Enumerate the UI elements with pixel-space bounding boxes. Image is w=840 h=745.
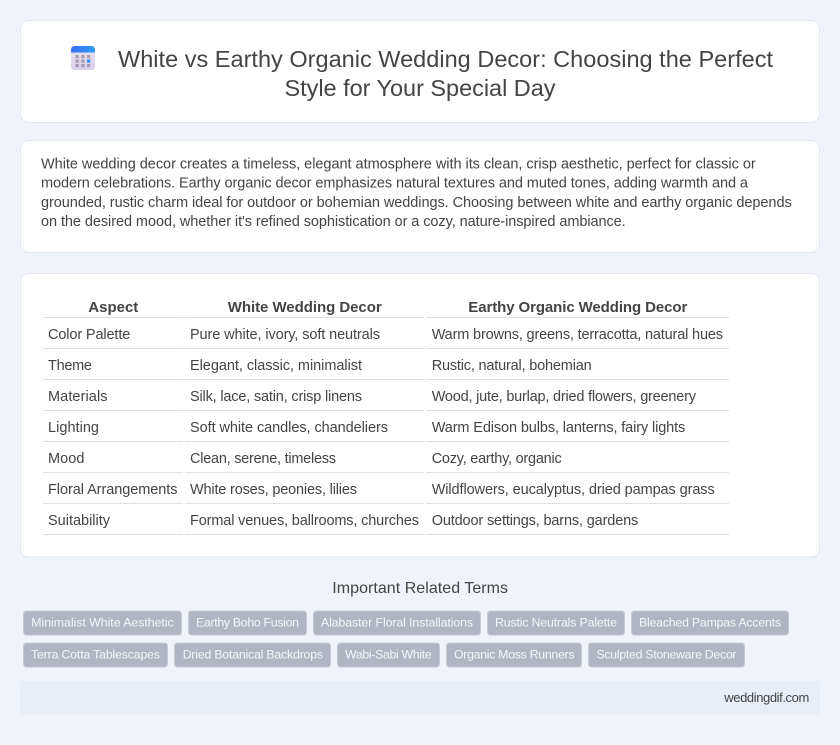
pill: alabaster floral installations: Alabaster Floral Installations (321, 616, 473, 630)
row: suitability: Outdoor settings, barns, gardens (432, 513, 638, 529)
title: Style for Your Special Day (284, 75, 556, 101)
table header (43, 299, 729, 318)
pill: bleached pampas accents: Bleached Pampas Accents (639, 616, 781, 630)
row: mood (43, 451, 729, 473)
row: color palette (43, 327, 729, 349)
title (118, 46, 773, 101)
pill: rustic neutrals palette (488, 611, 624, 635)
pill: sculpted stoneware decor (588, 643, 744, 667)
panel: comparison table (20, 274, 820, 557)
heading: important related terms: Important Related Terms (332, 580, 508, 597)
row: color palette: Warm browns, greens, terracotta, natural hues (432, 327, 723, 343)
row: materials: Wood, jute, burlap, dried flowers, greenery (432, 389, 697, 405)
pill: terra cotta tablescapes: Terra Cotta Tablescapes (31, 648, 160, 662)
intro paragraph (41, 156, 792, 230)
pill: minimalist white aesthetic: Minimalist White Aesthetic (31, 616, 174, 630)
row: mood: Mood (48, 451, 84, 467)
pill: organic moss runners: Organic Moss Runners (454, 648, 574, 662)
intro paragraph: on the desired mood, whether it's refined sophistication or a cozy, nature-inspired ambiance. (41, 214, 626, 230)
row: lighting: Lighting (48, 420, 99, 436)
intro paragraph: grounded, rustic charm ideal for outdoor or bohemian weddings. Choosing between white and earthy organic depends (41, 195, 792, 211)
pill: sculpted stoneware decor: Sculpted Stoneware Decor (596, 648, 736, 662)
row: mood: Clean, serene, timeless (190, 451, 336, 467)
row: lighting (43, 420, 729, 442)
row: materials: Materials (48, 389, 108, 405)
row: materials (43, 389, 729, 411)
pill: organic moss runners (446, 643, 582, 667)
row: theme: Elegant, classic, minimalist (190, 358, 362, 374)
intro paragraph: White wedding decor creates a timeless, elegant atmosphere with its clean, crisp aesthetic, perfect for classic or (41, 156, 756, 172)
pill: wabi-sabi white (338, 643, 440, 667)
pill: bleached pampas accents (632, 611, 788, 635)
panel: introduction (20, 140, 820, 252)
row: theme: Rustic, natural, bohemian (432, 358, 592, 374)
row: suitability: Suitability (48, 513, 111, 529)
pill: minimalist white aesthetic (24, 611, 182, 635)
pill: dried botanical backdrops: Dried Botanical Backdrops (183, 648, 323, 662)
row: floral arrangements: White roses, peonies, lilies (190, 482, 357, 498)
tag pills (24, 611, 788, 667)
footer bar (20, 681, 820, 714)
table header: White Wedding Decor (228, 299, 382, 316)
row: floral arrangements (43, 482, 729, 504)
table header: Aspect (88, 299, 138, 316)
intro paragraph: modern celebrations. Earthy organic decor emphasizes natural textures and muted tones, adding warmth and a (41, 176, 749, 192)
pill: earthy boho fusion: Earthy Boho Fusion (196, 616, 299, 630)
footer credit: weddingdif.com (723, 690, 809, 705)
pill: dried botanical backdrops (174, 643, 330, 667)
row: color palette: Color Palette (48, 327, 130, 343)
pill: earthy boho fusion (188, 611, 306, 635)
row: lighting: Warm Edison bulbs, lanterns, fairy lights (432, 420, 685, 436)
pill: alabaster floral installations (314, 611, 480, 635)
row: floral arrangements: Wildflowers, eucalyptus, dried pampas grass (432, 482, 715, 498)
row: theme (43, 358, 729, 380)
panel: header (20, 20, 820, 122)
pill: wabi-sabi white: Wabi-Sabi White (345, 648, 432, 662)
row: lighting: Soft white candles, chandeliers (190, 420, 388, 436)
row: floral arrangements: Floral Arrangements (48, 482, 178, 498)
row: suitability: Formal venues, ballrooms, churches (190, 513, 419, 529)
row: materials: Silk, lace, satin, crisp linens (190, 389, 362, 405)
row: suitability (43, 513, 729, 535)
row: mood: Cozy, earthy, organic (432, 451, 562, 467)
title: White vs Earthy Organic Wedding Decor: Choosing the Perfect (118, 46, 773, 72)
icon: calendar (71, 46, 95, 70)
pill: rustic neutrals palette: Rustic Neutrals Palette (495, 616, 617, 630)
row: color palette: Pure white, ivory, soft neutrals (190, 327, 380, 343)
row: theme: Theme (48, 358, 92, 374)
table header: Earthy Organic Wedding Decor (468, 299, 687, 316)
pill: terra cotta tablescapes (24, 643, 168, 667)
